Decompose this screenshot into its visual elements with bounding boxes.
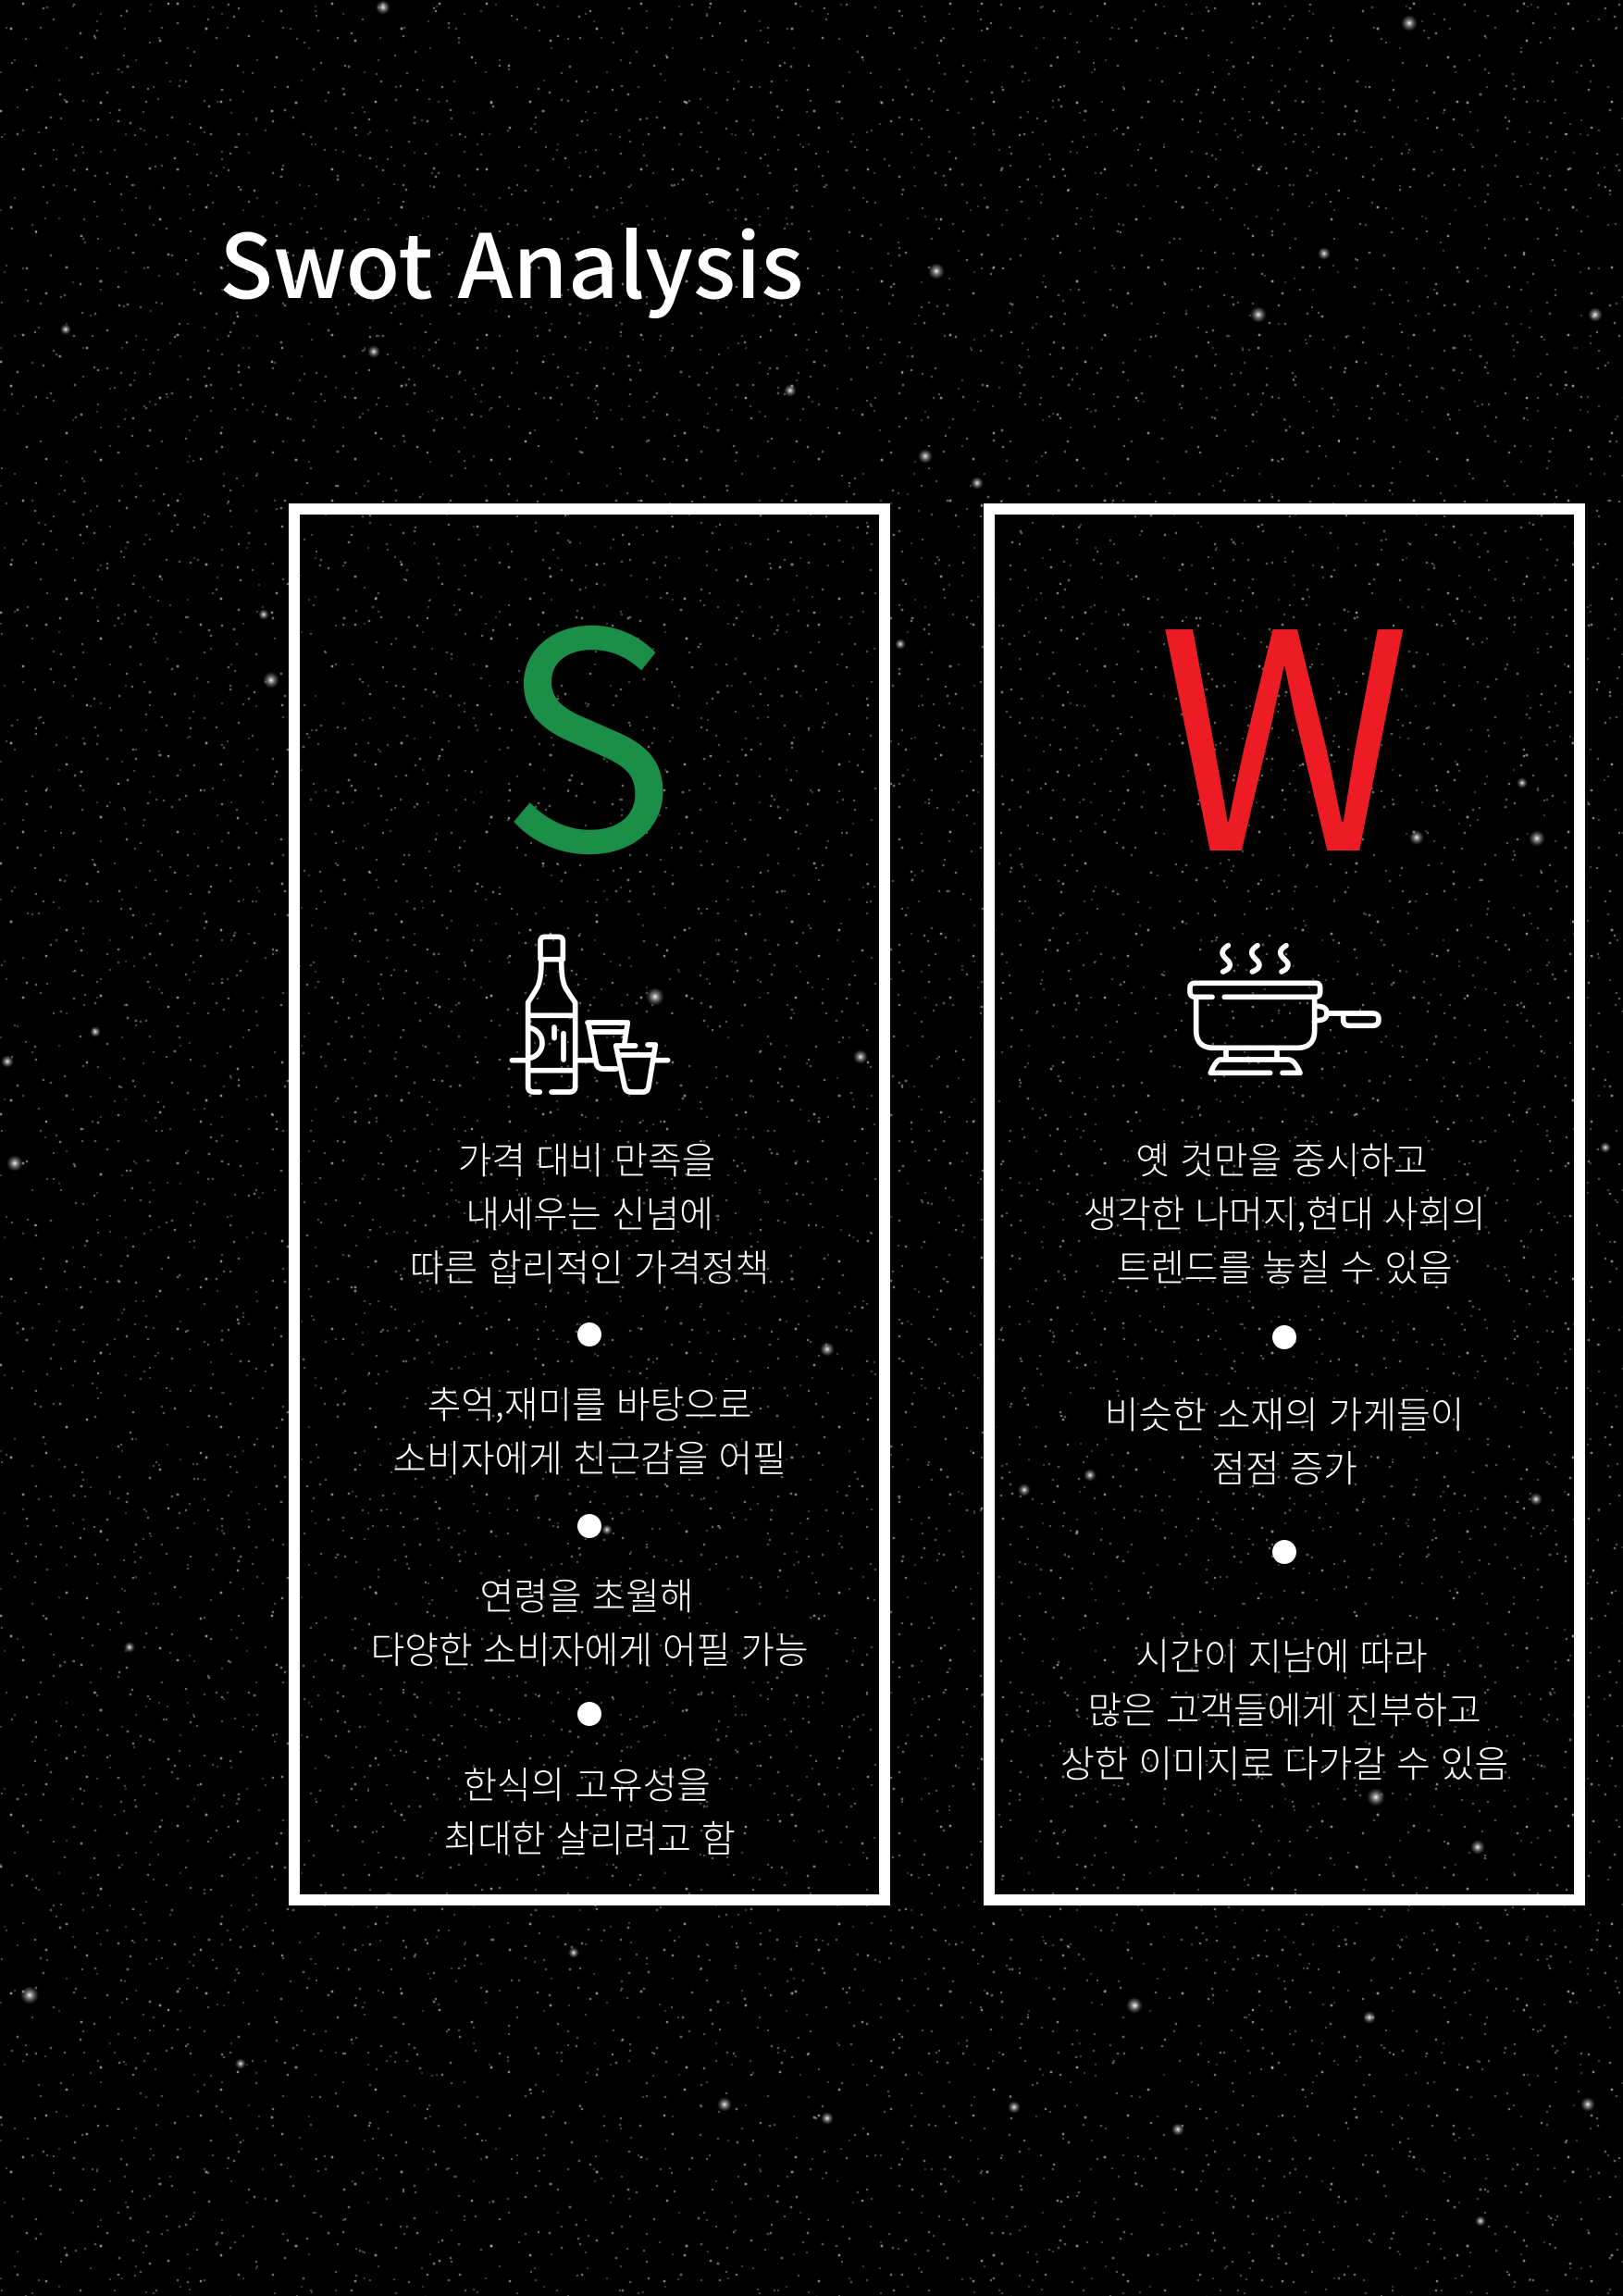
bullet dot bbox=[1272, 1325, 1296, 1349]
bullet dot bbox=[1272, 1540, 1296, 1564]
text: weakness 2: 비슷한 소재의 가게들이 점점 증가 bbox=[1105, 1385, 1464, 1493]
text: strength 2: 추억,재미를 바탕으로 소비자에게 친근감을 어필 bbox=[392, 1375, 787, 1483]
letter S: S bbox=[500, 501, 675, 937]
bullet dot bbox=[577, 1702, 601, 1726]
letter W: W bbox=[1158, 501, 1411, 937]
title: Swot Analysis bbox=[219, 195, 803, 324]
text: weakness 1: 옛 것만을 중시하고 생각한 나머지,현대 사회의 트렌드를 놓칠 수 있음 bbox=[1083, 1131, 1486, 1292]
panel: strengths bbox=[289, 503, 890, 1905]
text: strength 1: 가격 대비 만족을 내세우는 신념에 따른 합리적인 가격정책 bbox=[410, 1131, 769, 1292]
panel: weaknesses bbox=[984, 503, 1585, 1905]
text: weakness 3: 시간이 지남에 따라 많은 고객들에게 진부하고 상한 이미지로 다가갈 수 있음 bbox=[1060, 1627, 1508, 1788]
text: strength 3: 연령을 초월해 다양한 소비자에게 어필 가능 bbox=[371, 1567, 808, 1674]
bullet dot bbox=[577, 1322, 601, 1347]
bullet dot bbox=[577, 1514, 601, 1538]
icon: steaming pot bbox=[1187, 942, 1381, 1075]
text: strength 4: 한식의 고유성을 최대한 살리려고 함 bbox=[443, 1756, 736, 1863]
icon: soju bottle and cups bbox=[509, 935, 670, 1095]
